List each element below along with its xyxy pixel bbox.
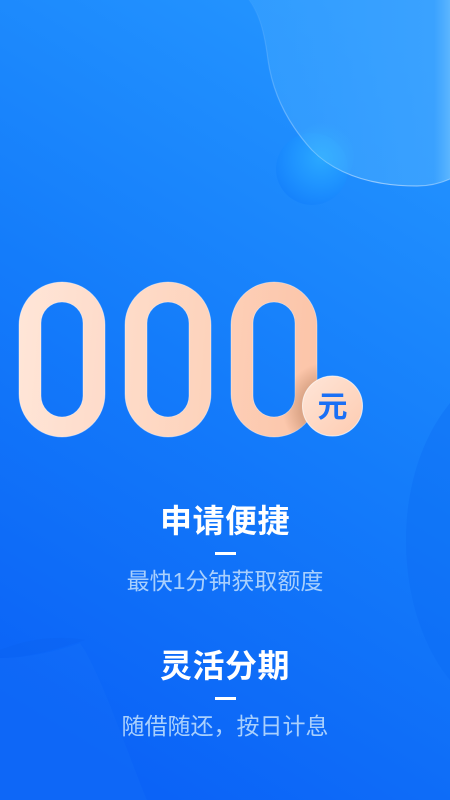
number zero three bbox=[230, 282, 318, 438]
feature one bbox=[127, 503, 323, 594]
unit badge bbox=[302, 376, 362, 436]
feature two bbox=[122, 648, 328, 739]
bottom left shape bbox=[0, 643, 147, 800]
heading: 灵活分期: 灵活分期 bbox=[160, 648, 290, 684]
upper left wave bbox=[0, 638, 85, 658]
number zero two bbox=[125, 282, 211, 437]
heading: 申请便捷: 申请便捷 bbox=[160, 503, 290, 539]
text: 随借随还，按日计息: 随借随还，按日计息 bbox=[122, 713, 328, 739]
orb bbox=[276, 133, 348, 205]
top right glass panel bbox=[249, 0, 450, 186]
number zero one bbox=[19, 282, 105, 437]
text: 最快1分钟获取额度: 最快1分钟获取额度 bbox=[127, 568, 323, 594]
divider bbox=[215, 697, 236, 700]
unit badge: 元 bbox=[318, 391, 348, 424]
divider bbox=[215, 552, 236, 555]
right side shape bbox=[406, 403, 450, 680]
